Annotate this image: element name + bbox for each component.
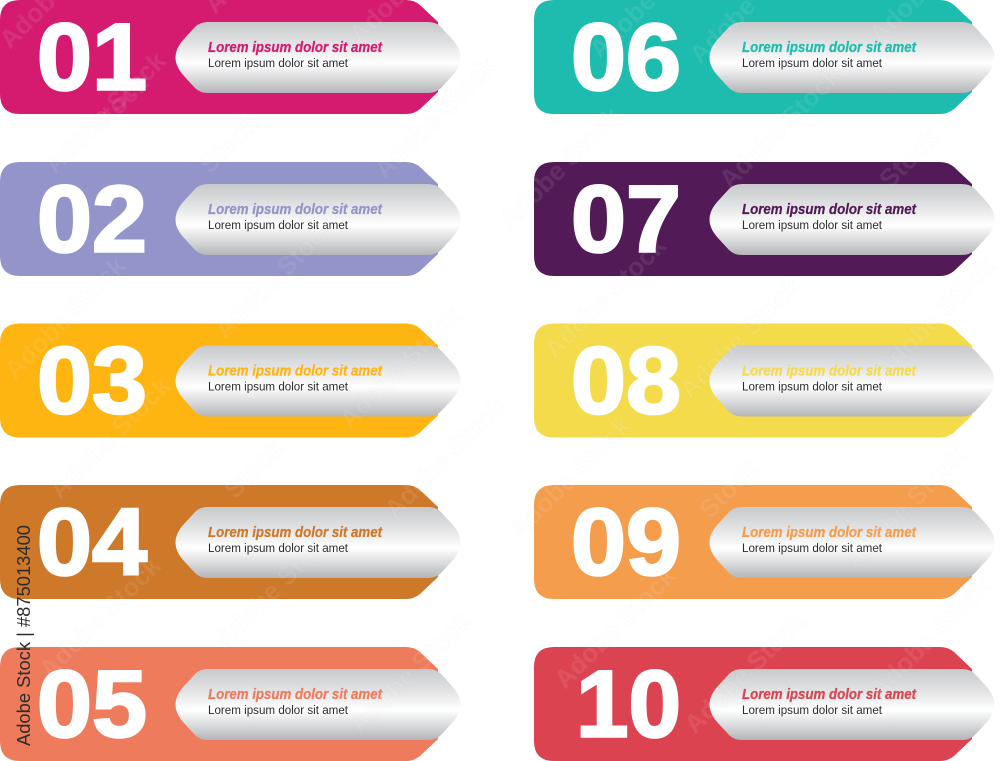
stock watermarks: Stock (83, 68, 155, 139)
panel: banner 01 background (0, 0, 438, 114)
stock watermarks: Adobe Stock (548, 560, 682, 694)
banner 07 (534, 162, 994, 276)
banner 10 (534, 647, 994, 761)
silver label (176, 507, 460, 578)
heading text: Lorem ipsum dolor sit amet (208, 687, 383, 703)
banner 01 (0, 0, 460, 114)
body text: Lorem ipsum dolor sit amet (208, 703, 349, 717)
body text: Lorem ipsum dolor sit amet (742, 218, 883, 232)
stock watermarks: Adobe Stock (868, 250, 1000, 384)
silver label (710, 346, 994, 416)
stock watermarks: Adobe Stock (713, 60, 847, 194)
heading text: Lorem ipsum dolor sit amet (742, 40, 917, 56)
silver label (176, 669, 460, 740)
silver label (710, 507, 994, 578)
banner 06 (534, 0, 994, 114)
number 09: 09 (571, 490, 681, 596)
silver label (710, 22, 994, 93)
body text: Lorem ipsum dolor sit amet (742, 541, 883, 555)
banner 04 (0, 485, 460, 599)
stock watermarks: Adobe Stock (863, 570, 997, 704)
number 04: 04 (37, 490, 147, 596)
banner 03 (0, 324, 460, 438)
panel: banner 09 background (534, 485, 972, 599)
side credit label: Adobe Stock | #875013400 (14, 525, 34, 746)
silver label (176, 184, 460, 255)
stock watermarks: Adobe Stock (538, 230, 672, 364)
silver label (710, 184, 994, 255)
body text: Lorem ipsum dolor sit amet (208, 218, 349, 232)
stock watermarks: Stock (693, 453, 765, 524)
number 07: 07 (571, 166, 681, 272)
stock watermarks: Adobe Stock (0, 250, 132, 384)
silver label (710, 669, 994, 740)
stock watermarks: Adobe Stock (33, 550, 167, 684)
number 02: 02 (37, 166, 147, 272)
heading text: Lorem ipsum dolor sit amet (208, 525, 383, 541)
stock watermarks: Adobe Stock (343, 605, 477, 739)
stock watermarks: Adobe Stock (368, 50, 502, 184)
stock watermarks: Adobe Stock (208, 210, 342, 344)
number 08: 08 (571, 328, 681, 434)
stock watermarks: Adobe Stock (838, 440, 972, 574)
heading text: Lorem ipsum dolor sit amet (742, 525, 917, 541)
panel: banner 08 background (534, 324, 972, 438)
body text: Lorem ipsum dolor sit amet (742, 56, 883, 70)
heading text: Lorem ipsum dolor sit amet (208, 364, 383, 380)
banner 09 (534, 485, 994, 599)
number 06: 06 (571, 4, 681, 110)
stock watermarks: Adobe Stock (38, 45, 172, 179)
stock watermarks: Stock (873, 123, 945, 194)
body text: Lorem ipsum dolor sit amet (208, 380, 349, 394)
heading text: Lorem ipsum dolor sit amet (742, 202, 917, 218)
silver label (176, 346, 460, 416)
number 01: 01 (37, 4, 147, 110)
number 10: 10 (576, 652, 681, 758)
body text: Lorem ipsum dolor sit amet (208, 56, 349, 70)
number 03: 03 (37, 328, 147, 434)
stock watermarks: Stock (218, 433, 290, 504)
stock watermarks: Adobe Stock (503, 410, 637, 544)
panel: banner 04 background (0, 485, 438, 599)
stock watermarks: Adobe Stock (333, 300, 467, 434)
body text: Lorem ipsum dolor sit amet (742, 380, 883, 394)
stock watermarks: Adobe Stock (43, 370, 177, 504)
panel: banner 03 background (0, 324, 438, 438)
banner 08 (534, 324, 994, 438)
panel: banner 10 background (534, 647, 972, 761)
heading text: Lorem ipsum dolor sit amet (742, 364, 917, 380)
banner 05 (0, 647, 460, 761)
panel: banner 02 background (0, 162, 438, 276)
stock watermarks: Adobe Stock (208, 520, 342, 654)
stock watermarks: Adobe Stock (673, 270, 807, 404)
panel: banner 06 background (534, 0, 972, 114)
stock watermarks: Adobe Stock (378, 390, 512, 524)
panel: banner 05 background (0, 647, 438, 761)
silver label (176, 22, 460, 93)
heading text: Lorem ipsum dolor sit amet (208, 40, 383, 56)
stock watermarks: Stock (193, 108, 265, 179)
body text: Lorem ipsum dolor sit amet (208, 541, 349, 555)
heading text: Lorem ipsum dolor sit amet (742, 687, 917, 703)
number 05: 05 (37, 652, 147, 758)
stock watermarks: Adobe Stock (678, 605, 812, 739)
panel: banner 07 background (534, 162, 972, 276)
body text: Lorem ipsum dolor sit amet (742, 703, 883, 717)
heading text: Lorem ipsum dolor sit amet (208, 202, 383, 218)
stock watermarks: Adobe Stock (493, 100, 627, 234)
banner 02 (0, 162, 460, 276)
